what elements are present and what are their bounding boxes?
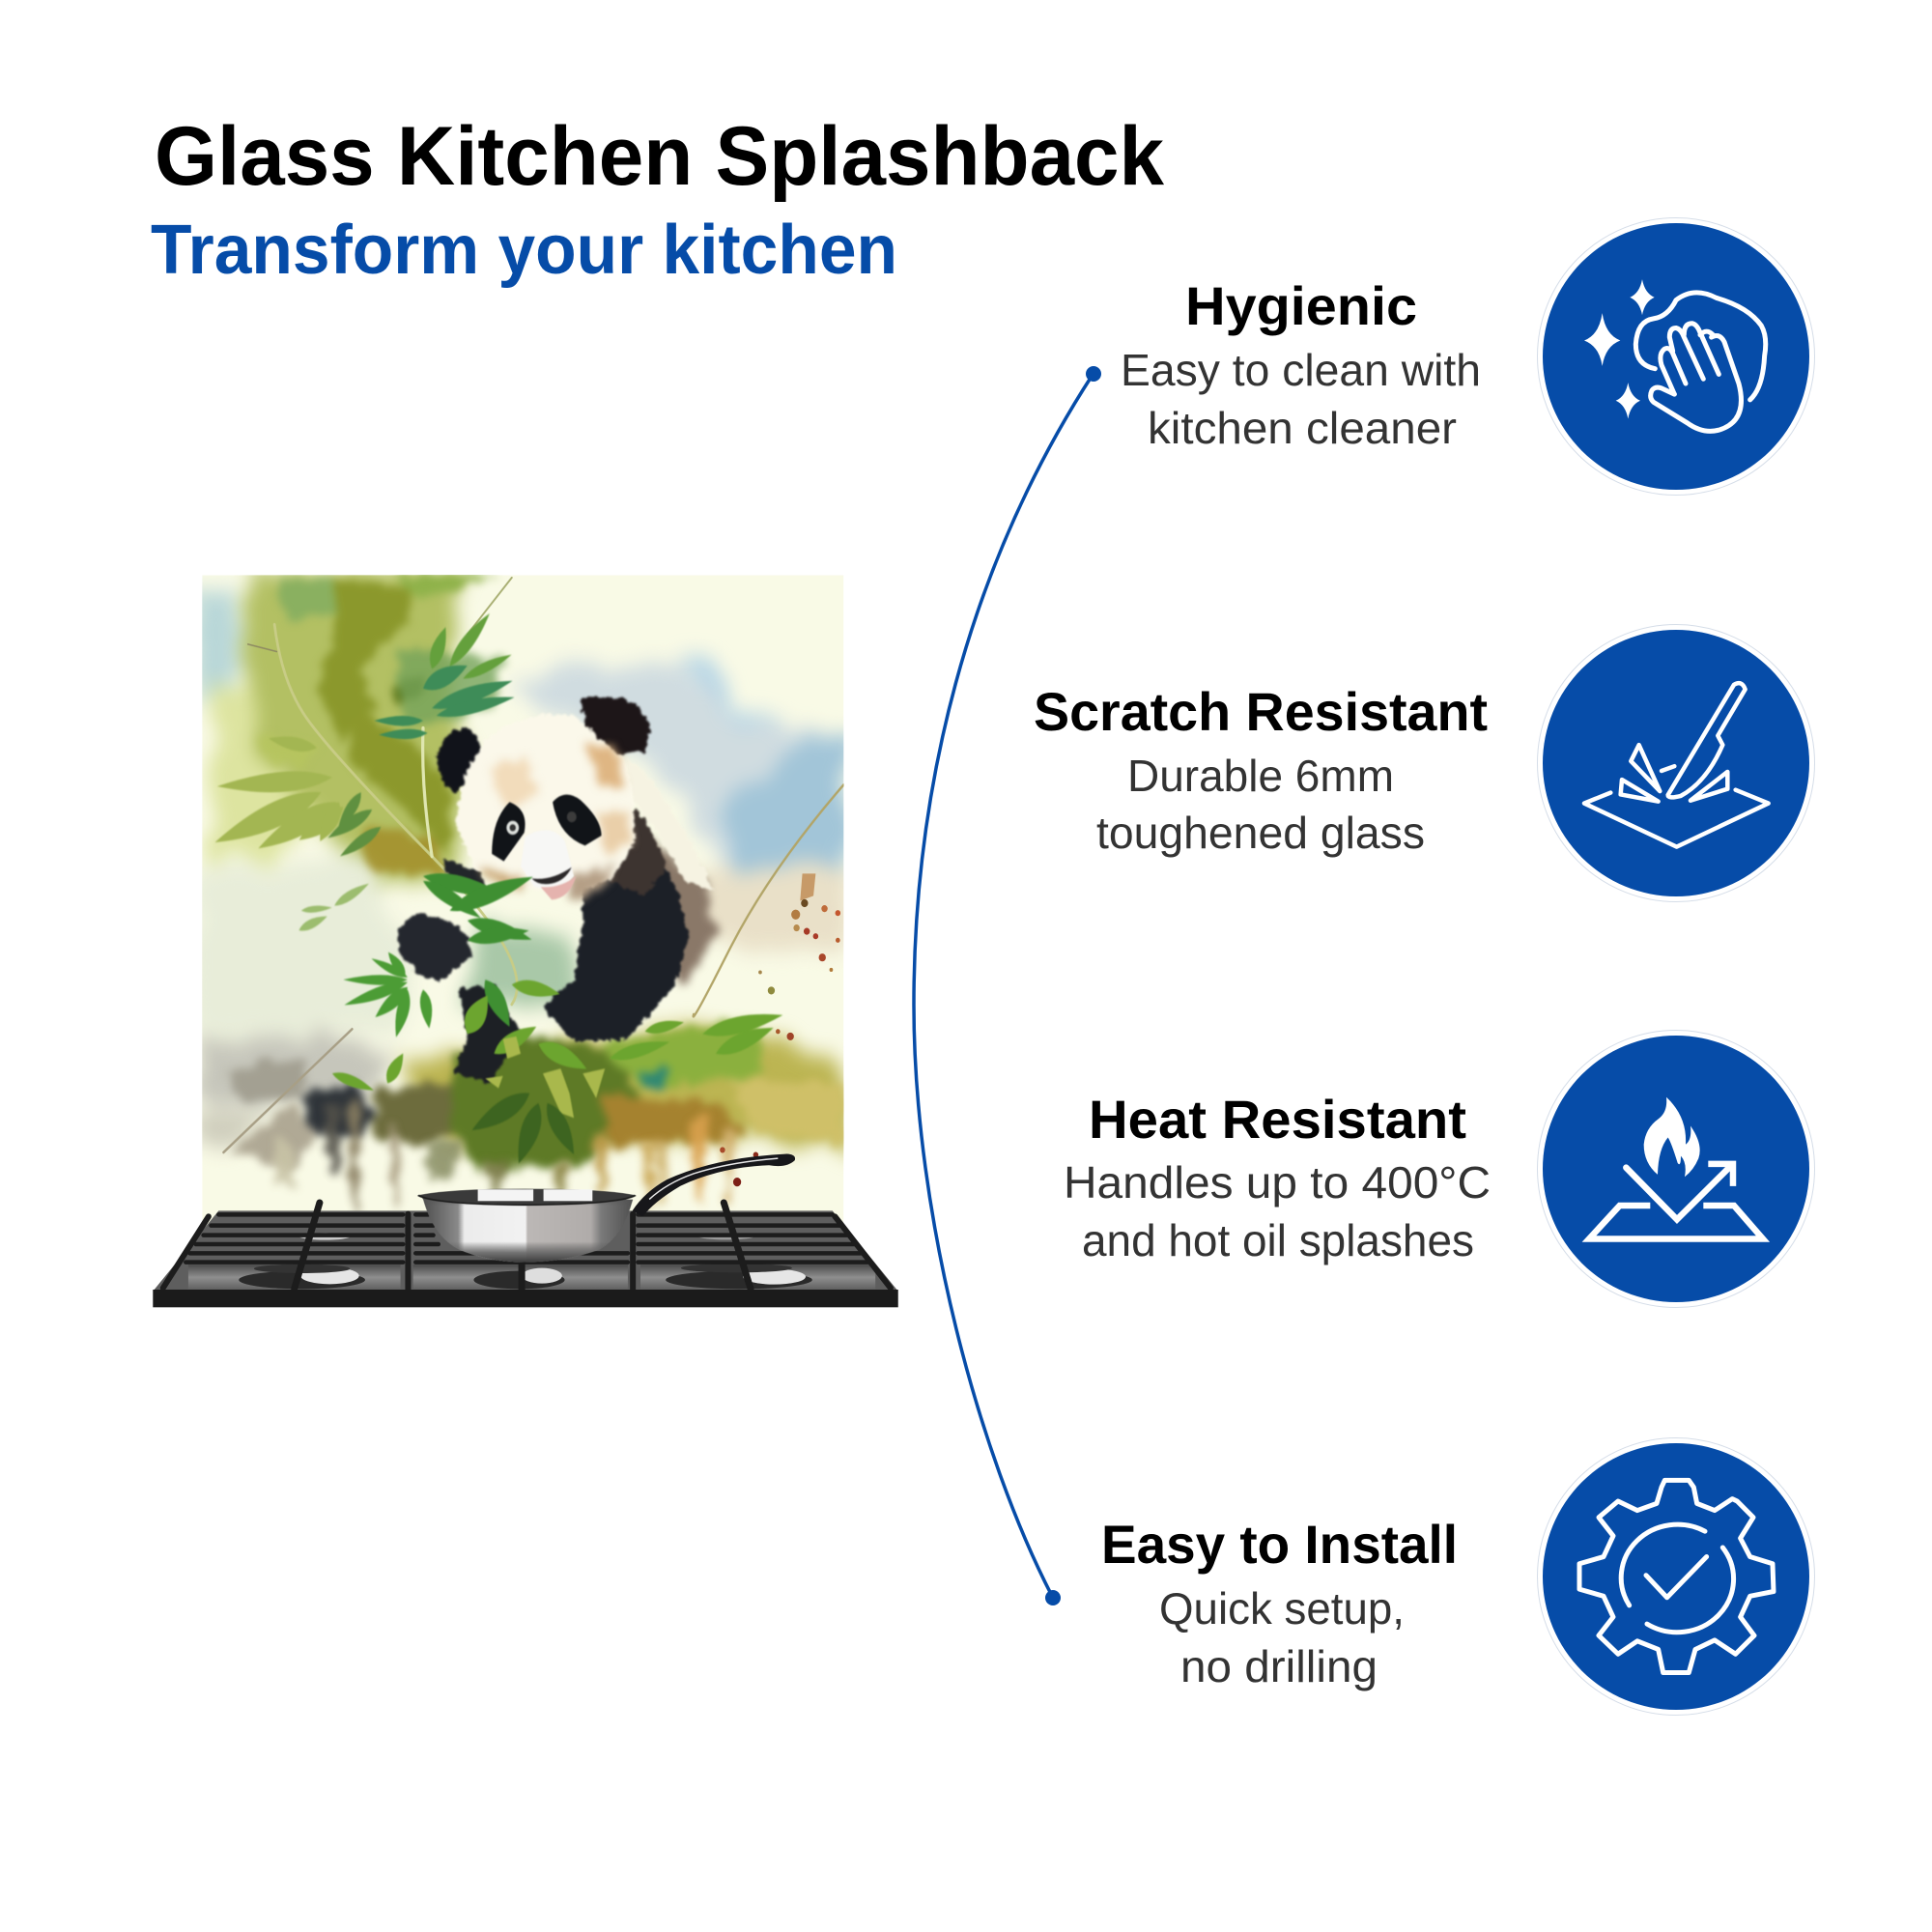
feature: Hygienic: Easy to clean with [1121,345,1481,395]
panel: panda splashback with hob and pan [153,570,898,1307]
feature: Hygienic: kitchen cleaner [1148,403,1457,453]
icon: flame on glass with arrow [1538,1030,1814,1308]
feature: Easy to Install: Easy to Install [1101,1514,1458,1575]
pan bowl [418,1189,636,1263]
panda body [396,696,714,1083]
title: Glass Kitchen Splashback [155,110,1164,203]
pan handle [633,1153,795,1216]
feature: Scratch Resistant: toughened glass [1096,808,1425,858]
feature: Heat Resistant: Heat Resistant [1089,1089,1466,1150]
feature: Scratch Resistant: Durable 6mm [1127,751,1394,801]
connector curve with end dots [914,366,1101,1605]
feature: Heat Resistant: Handles up to 400°C [1064,1157,1491,1208]
feature: Heat Resistant: and hot oil splashes [1082,1215,1474,1265]
feature: Easy to Install: no drilling [1180,1641,1378,1691]
panda face [492,795,602,899]
bamboo leaves behind panda [211,609,516,934]
feature: Easy to Install: Quick setup, [1159,1583,1405,1634]
paint splatter [720,873,840,1186]
feature: Heat Resistant [1064,1089,1491,1265]
feature: Hygienic [1121,275,1481,453]
panda head [455,714,634,895]
feature: Scratch Resistant: Scratch Resistant [1034,681,1488,742]
feature: Easy to Install [1101,1514,1458,1691]
frying pan [418,1153,795,1263]
paint drips [272,1103,735,1211]
burners [239,1233,812,1289]
feature: Hygienic: Hygienic [1185,275,1417,336]
icon: hand wiping with sparkles [1538,218,1814,495]
bamboo leaves in front of panda [330,867,784,1167]
watercolour panda artwork [192,570,849,1227]
hob with grates and burners [153,1203,898,1307]
bamboo stems [223,578,843,1152]
subtitle: Transform your kitchen [151,212,897,289]
icon: knife on glass [1538,624,1814,902]
feature: Scratch Resistant [1034,681,1488,858]
icon: gear with check mark [1538,1437,1814,1716]
